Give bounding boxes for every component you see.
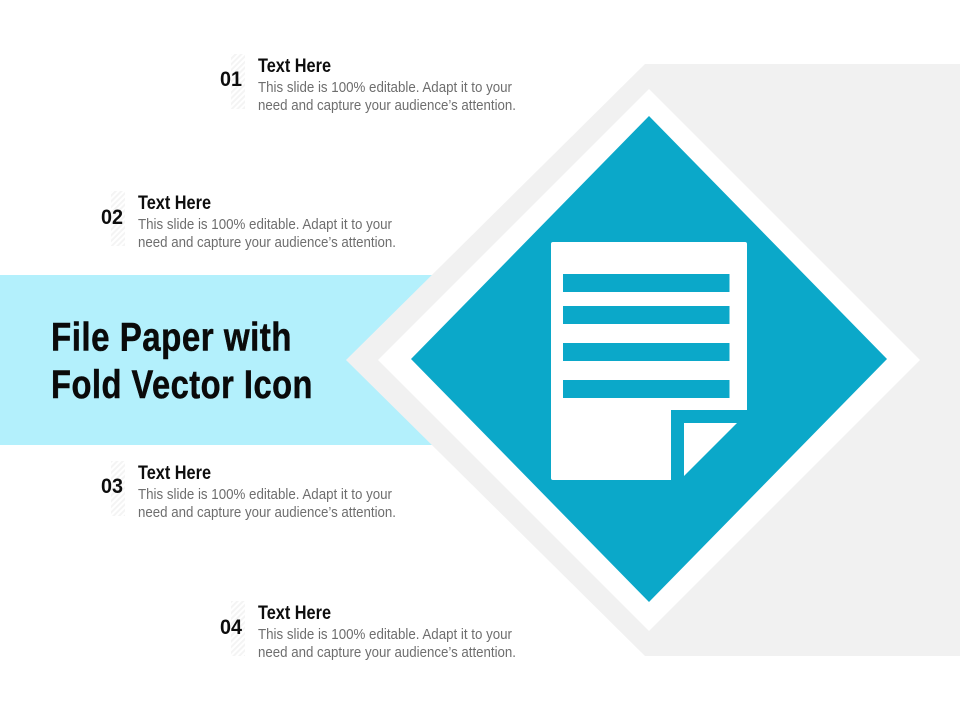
body text: need and capture your audience’s attention. [138,234,396,251]
item 02 [101,191,396,251]
body text [258,626,516,661]
number: 01 [220,67,242,91]
white diamond [378,89,920,631]
body text: This slide is 100% editable. Adapt it to your [138,216,392,233]
heading: Text Here [258,603,331,624]
hatch marker [231,54,245,109]
hatch marker [111,191,125,246]
text line 3 [563,343,730,361]
body text: This slide is 100% editable. Adapt it to your [138,486,392,503]
body text: need and capture your audience’s attention. [258,97,516,114]
body text: This slide is 100% editable. Adapt it to your [258,79,512,96]
heading: Text Here [138,193,211,214]
text line 1 [563,274,730,292]
hatch marker [111,461,125,516]
heading: Text Here [138,463,211,484]
hatch marker [231,601,245,656]
number: 04 [220,615,242,639]
body text: This slide is 100% editable. Adapt it to your [258,626,512,643]
number: 02 [101,205,123,229]
number: 03 [101,474,123,498]
folded corner [684,423,737,476]
title band [0,275,440,445]
paper sheet [551,242,747,480]
blue diamond [411,116,887,602]
body text [138,216,396,251]
body text: need and capture your audience’s attention. [138,504,396,521]
body text [258,79,516,114]
item 04 [220,601,516,661]
body text [138,486,396,521]
title: File Paper with [51,316,292,360]
grey backing shape [346,64,960,656]
text line 2 [563,306,730,324]
item 01 [220,54,516,114]
item 03 [101,461,396,521]
icon: file paper with fold [551,242,747,480]
body text: need and capture your audience’s attention. [258,644,516,661]
title: Fold Vector Icon [51,363,313,407]
title [51,316,313,407]
text line 4 [563,380,730,398]
heading: Text Here [258,56,331,77]
